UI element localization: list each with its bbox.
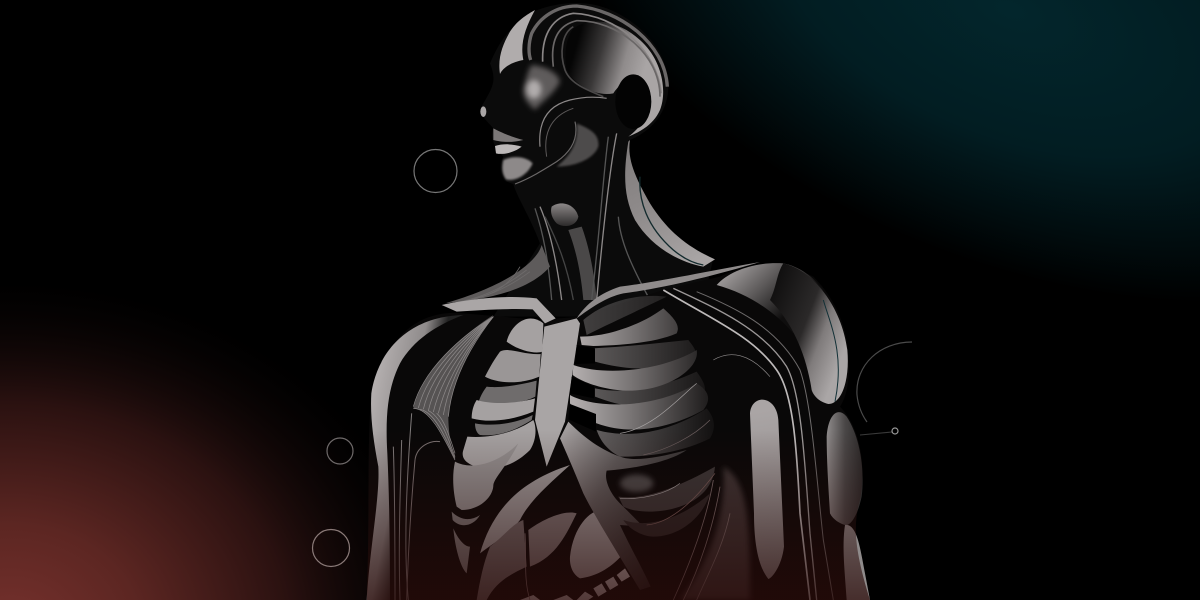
flank muscle shade (680, 467, 750, 600)
upper lip (493, 128, 523, 142)
head and neck (445, 3, 715, 317)
intestine teeth (520, 565, 637, 600)
left pectoral fan (413, 315, 493, 460)
outer arm muscle (827, 412, 863, 525)
neck teal contour (640, 177, 703, 265)
chin (502, 157, 533, 180)
left arm strands (393, 413, 412, 600)
inner contour left (407, 441, 440, 600)
cranium (565, 22, 663, 137)
lower lip (495, 144, 522, 154)
ring: middle left (327, 438, 353, 464)
red tint over lower body (363, 430, 877, 600)
forearm sliver (844, 525, 870, 600)
cheek highlight (523, 65, 560, 110)
left arm and shoulder (367, 315, 463, 600)
clavicle right (577, 262, 760, 318)
torso (363, 262, 877, 600)
cheek muscle layers (515, 97, 607, 184)
lower chest shade (620, 475, 653, 492)
shoulder cap top (717, 263, 823, 333)
thyroid cartilage (551, 203, 578, 226)
neck tendons (535, 133, 650, 300)
floating rib left (452, 512, 480, 573)
deltoid (770, 263, 848, 404)
right ribs (570, 296, 714, 457)
lower rib bands (618, 467, 715, 537)
lower abdomen strands (525, 480, 730, 600)
nose tip (480, 106, 486, 117)
fan fill (413, 315, 493, 460)
left ribs (463, 318, 543, 469)
abdominal panel (528, 512, 577, 567)
arc: right side (857, 342, 912, 422)
arm tendons (663, 288, 833, 600)
rib highlight lines (620, 383, 715, 525)
biceps capsule (750, 400, 784, 579)
black gaps beside sternum (568, 345, 596, 432)
abdominal pectoral fold (480, 465, 570, 553)
abdominal oblique (477, 520, 527, 600)
deltoid teal contour (823, 300, 838, 402)
cranial ridges (529, 6, 667, 97)
sternum (535, 318, 580, 467)
neck band right (625, 140, 715, 267)
small node with connector (860, 428, 898, 435)
trachea (568, 227, 597, 300)
costal arch (560, 422, 687, 590)
ring: lower left (312, 530, 350, 566)
torso dark base (367, 265, 870, 600)
upper neck fan (443, 267, 530, 305)
head silhouette (481, 3, 713, 317)
clavicle left (442, 297, 556, 323)
stomach (570, 510, 625, 578)
lower left cartilage (453, 443, 518, 510)
jaw muscle (557, 123, 598, 167)
cheekbone bright spot (527, 80, 541, 99)
ear (615, 74, 651, 129)
forehead highlight (499, 10, 535, 74)
ring: upper left (414, 150, 457, 192)
left trapezius sliver (445, 245, 550, 303)
